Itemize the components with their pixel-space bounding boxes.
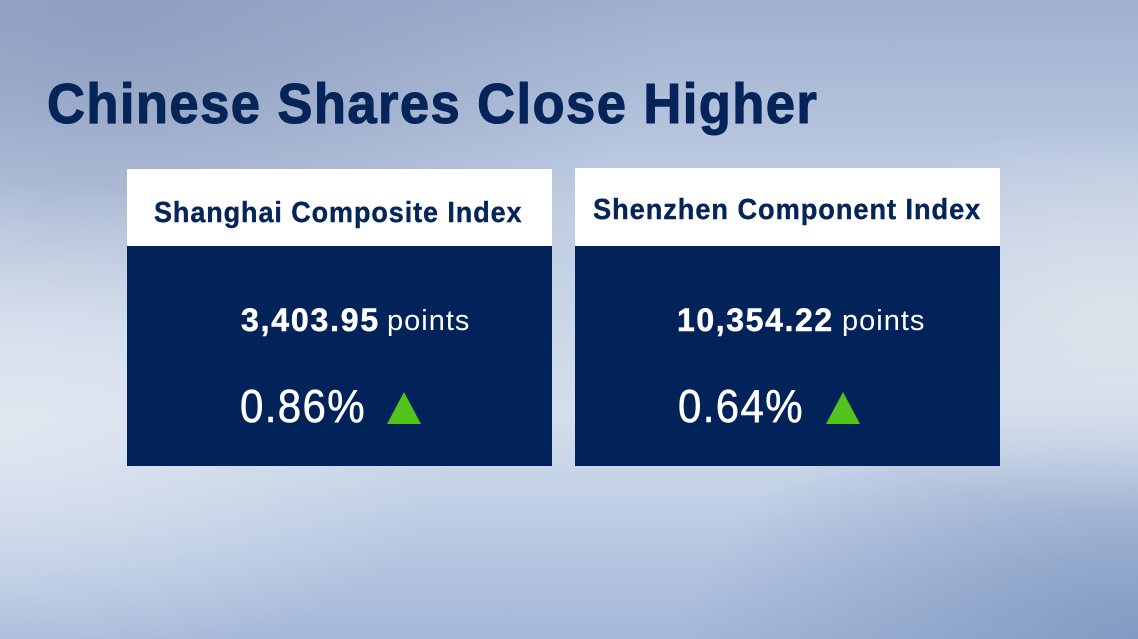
- percent change: Shanghai: 0.86%: [240, 380, 366, 432]
- panel heading: Shenzhen: Shenzhen Component Index: [593, 194, 981, 226]
- percent change: Shenzhen: 0.64%: [678, 380, 804, 432]
- points number: Shanghai: 3,403.95: [241, 302, 380, 338]
- panel heading: Shanghai: [127, 169, 552, 246]
- points unit: Shenzhen: points: [842, 305, 925, 337]
- panel heading: Shanghai: Shanghai Composite Index: [154, 197, 522, 229]
- title: Chinese Shares Close Higher: [47, 72, 818, 136]
- points unit: Shanghai: points: [387, 305, 470, 337]
- panel: Shanghai Composite Index: [127, 169, 552, 466]
- points number: Shenzhen: 10,354.22: [677, 302, 834, 338]
- panel body: Shanghai: [127, 246, 552, 466]
- panel body: Shenzhen: [575, 246, 1000, 466]
- panel: Shenzhen Component Index: [575, 168, 1000, 466]
- panel heading: Shenzhen: [575, 168, 1000, 246]
- icon: green up triangle: [387, 392, 421, 424]
- icon: green up triangle: [826, 392, 860, 424]
